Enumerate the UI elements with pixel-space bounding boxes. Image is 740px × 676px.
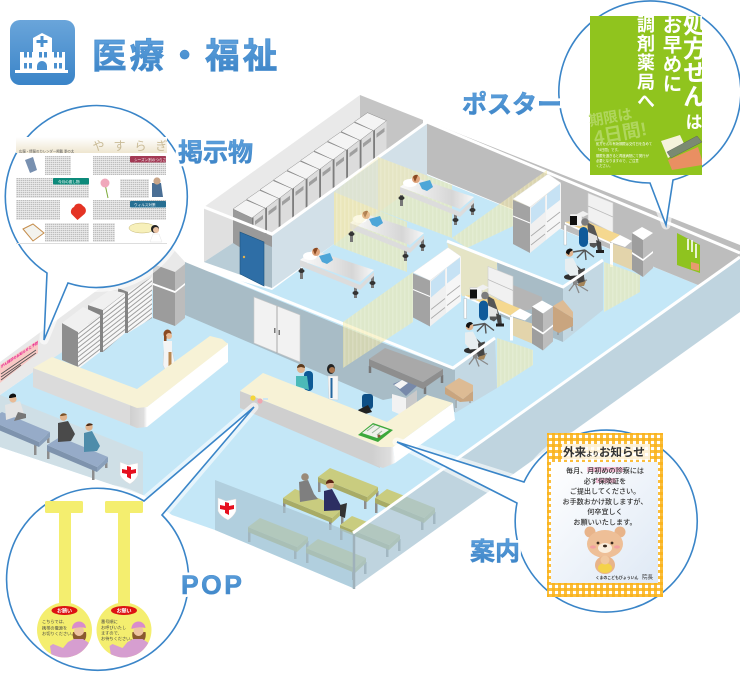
shelves	[62, 264, 185, 369]
icon: bear	[584, 526, 626, 574]
pop stand 2: お呼びいたし	[101, 624, 126, 631]
callout: poster	[559, 1, 740, 225]
notice body: 毎月、月初めの診察には	[566, 466, 644, 475]
curtain: upper office	[604, 262, 640, 312]
green poster: 必要となりますので、ご注意	[596, 158, 639, 163]
curtain: lobby	[343, 272, 413, 368]
office upper	[513, 174, 653, 293]
staff: nurse behind first counter	[163, 330, 176, 372]
bench green right	[375, 489, 436, 530]
notice body: 院長	[642, 573, 653, 581]
bedroom divider wall	[272, 122, 427, 288]
green poster: は	[682, 113, 702, 130]
pop stand 1	[37, 501, 92, 659]
curtain: lower office	[497, 338, 533, 388]
notice body: 必ず保険証を	[584, 476, 626, 486]
notice body	[551, 462, 658, 583]
bulletin tags: ウィルス対策	[134, 202, 156, 207]
left front wall	[0, 395, 143, 495]
callout: bulletin board	[5, 106, 187, 340]
label: POP: POP	[181, 570, 244, 600]
notice body: お手数おかけ致しますが、	[563, 497, 647, 506]
green poster: 処方せん	[678, 12, 706, 108]
notice body: くまのこどもびょういん	[596, 575, 639, 580]
pop stand 2: ますので、	[101, 630, 122, 636]
bulletin header: やすらぎ	[92, 139, 177, 153]
front translucent walls	[215, 257, 740, 589]
green poster: 期限を過ぎると再度病院にて発行が	[596, 153, 649, 158]
main reception counter	[240, 373, 455, 468]
bulletin tags: シーズン別のつらさ	[134, 157, 167, 162]
bench green mid	[283, 489, 344, 530]
bench left 1	[0, 412, 50, 455]
bench left 2	[47, 437, 108, 480]
storage box lower	[445, 378, 473, 408]
bed 1	[398, 175, 476, 225]
poster on left wall	[0, 340, 38, 383]
bed 2	[348, 211, 426, 261]
pop stand 1: お願い	[57, 607, 72, 614]
bulletin text blocks	[16, 156, 166, 242]
upper partition strip	[447, 241, 603, 287]
curtain: middle	[334, 192, 407, 272]
green poster: 期限は	[588, 106, 634, 130]
callout: POP	[7, 407, 254, 670]
label: poster: ポスター	[462, 91, 562, 119]
pop stand 2: お願い	[116, 607, 132, 614]
pop stand 2	[96, 501, 152, 659]
pop stand 1: こちらでは、	[42, 619, 67, 625]
leaflet on counter	[358, 423, 393, 442]
green poster: 「4日間」です。	[596, 147, 621, 152]
pop stand 1: お切りください。	[42, 630, 76, 637]
label: bulletin: 掲示物	[178, 139, 253, 167]
lobby back wall	[185, 262, 455, 412]
bulletin header: 広報・情報のカレンダー掲載 季の太	[19, 148, 75, 154]
title: 医療・福祉	[92, 38, 280, 76]
bench green back	[318, 468, 378, 509]
icon: hospital	[10, 20, 75, 85]
label: guide: 案内	[470, 538, 520, 566]
bench green front right	[340, 516, 400, 557]
green poster: お早めに	[659, 15, 682, 93]
bench green front 2	[306, 539, 366, 580]
exam table	[369, 348, 443, 394]
poster on left wall: がん検診のお知らせと予防	[1, 340, 38, 369]
callout: notice	[397, 430, 697, 612]
bed 3	[298, 248, 376, 298]
back wall	[427, 121, 740, 285]
office lower	[413, 248, 553, 366]
gingham notice frame	[547, 433, 663, 597]
pop stand 1: 携帯の電源を	[42, 624, 67, 632]
bulletin illustrations	[16, 157, 167, 244]
left lobby back wall	[0, 240, 185, 395]
icon: blue door	[240, 232, 264, 286]
green poster: 処方せんの有効期限は交付日を含めて	[596, 141, 652, 146]
label: poster: ポスター	[462, 91, 562, 119]
waiting patients left	[5, 394, 100, 452]
floor	[0, 175, 698, 588]
lobby wall strip	[165, 252, 495, 368]
notice body: お願いいたします。	[573, 518, 637, 526]
double door	[254, 297, 300, 362]
label: POP: POP	[181, 570, 244, 600]
notice title	[562, 444, 650, 460]
curtains in front of bed room	[334, 157, 378, 245]
pop on counter	[250, 395, 268, 404]
bulletin header	[16, 137, 177, 154]
green poster: 調剤薬局へ	[635, 15, 655, 111]
small poster on wall	[677, 233, 700, 273]
door wall	[204, 209, 272, 288]
notice body: ご提出してください。	[570, 486, 640, 496]
waiting patients centre	[299, 473, 347, 518]
bulletin tags	[53, 156, 167, 208]
storage box upper	[553, 300, 573, 335]
label: guide: 案内	[470, 538, 520, 566]
back curtains	[378, 157, 547, 248]
green poster	[588, 12, 706, 175]
staff behind reception	[296, 364, 373, 415]
notice title: 外来よりお知らせ	[563, 445, 645, 459]
storage room with lockers	[204, 95, 423, 262]
bulletin tags: 今月の癒し物	[58, 179, 80, 184]
first reception counter	[33, 336, 228, 428]
office partition wall	[447, 243, 603, 413]
copier	[392, 380, 417, 417]
icon: red cross centre	[218, 498, 236, 520]
bench green front	[248, 518, 308, 559]
green poster: ください。	[596, 163, 612, 168]
green poster: 4日間!	[592, 118, 648, 148]
pop stand 2: 番号順に	[101, 618, 118, 625]
pop stand 2: お待ちください。	[101, 635, 135, 642]
wall top strips	[204, 122, 740, 253]
icon: red cross left	[120, 462, 138, 484]
notice body: 何卒宜しく	[587, 507, 623, 516]
label: bulletin: 掲示物	[178, 139, 253, 167]
